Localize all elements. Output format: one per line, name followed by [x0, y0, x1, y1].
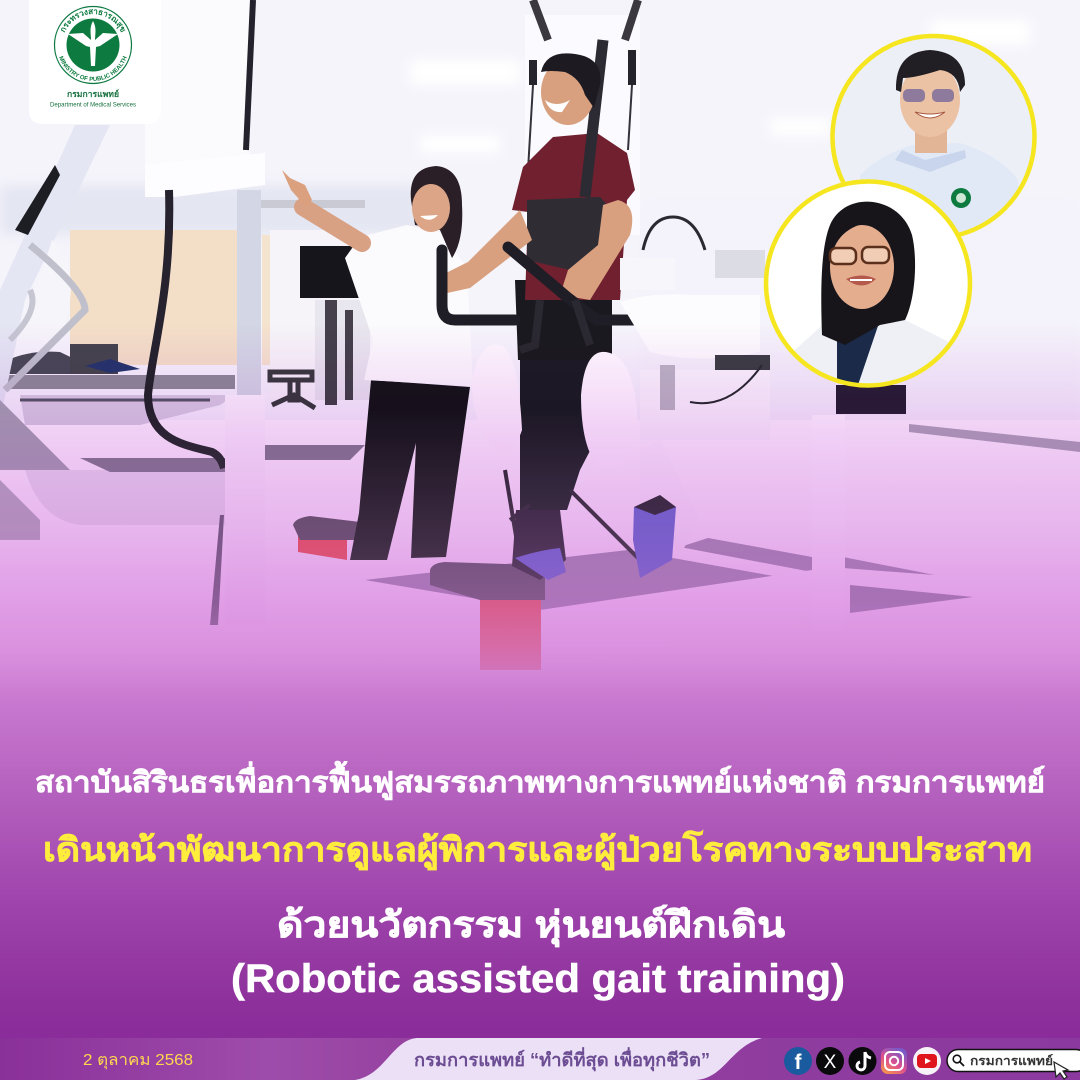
slogan banner: กรมการแพทย์ “ทำดีที่สุด เพื่อทุกชีวิต” — [414, 1047, 710, 1072]
search pill: กรมการแพทย์ — [970, 1054, 1053, 1068]
portrait: male doctor — [832, 36, 1034, 250]
logo caption: Department of Medical Services — [50, 102, 136, 108]
robotic machine parts — [472, 217, 770, 580]
portrait: female doctor — [766, 182, 970, 395]
icon: x — [816, 1047, 844, 1075]
icon: ministry of public health seal: กระทรวงสาธารณสุข — [61, 9, 126, 32]
search pill — [947, 1050, 1080, 1072]
logo card — [29, 0, 145, 124]
icon: tiktok — [848, 1047, 876, 1075]
therapist in white coat — [282, 166, 473, 560]
slogan banner — [355, 1038, 762, 1080]
heading line 2: เดินหน้าพัฒนาการดูแลผู้พิการและผู้ป่วยโรคทางระบบประสาท — [43, 830, 1032, 871]
logo caption: กรมการแพทย์ — [67, 89, 119, 99]
logo caption — [50, 89, 136, 108]
icon: cursor — [1054, 1062, 1068, 1079]
date: 2 ตุลาคม 2568 — [83, 1052, 193, 1070]
heading line 3: ด้วยนวัตกรรม หุ่นยนต์ฝึกเดิน — [277, 904, 785, 948]
treadmill and steps — [293, 385, 973, 670]
icon: ministry of public health seal: MINISTRY OF PUBLIC HEALTH — [59, 56, 127, 81]
heading line 1: สถาบันสิรินธรเพื่อการฟื้นฟูสมรรถภาพทางการแพทย์แห่งชาติ กรมการแพทย์ — [35, 760, 1045, 800]
icon: facebook: f — [794, 1051, 802, 1074]
headline text block — [35, 760, 1045, 1001]
icon: x: X — [824, 1052, 837, 1073]
icon: ministry of public health seal — [54, 6, 132, 84]
footer bar — [0, 1038, 1080, 1080]
icon: youtube — [913, 1047, 941, 1075]
heading line 4: (Robotic assisted gait training) — [231, 957, 845, 1001]
patient in robotic gait trainer — [438, 0, 733, 510]
icon: instagram — [881, 1048, 907, 1074]
icon: facebook — [784, 1047, 812, 1075]
